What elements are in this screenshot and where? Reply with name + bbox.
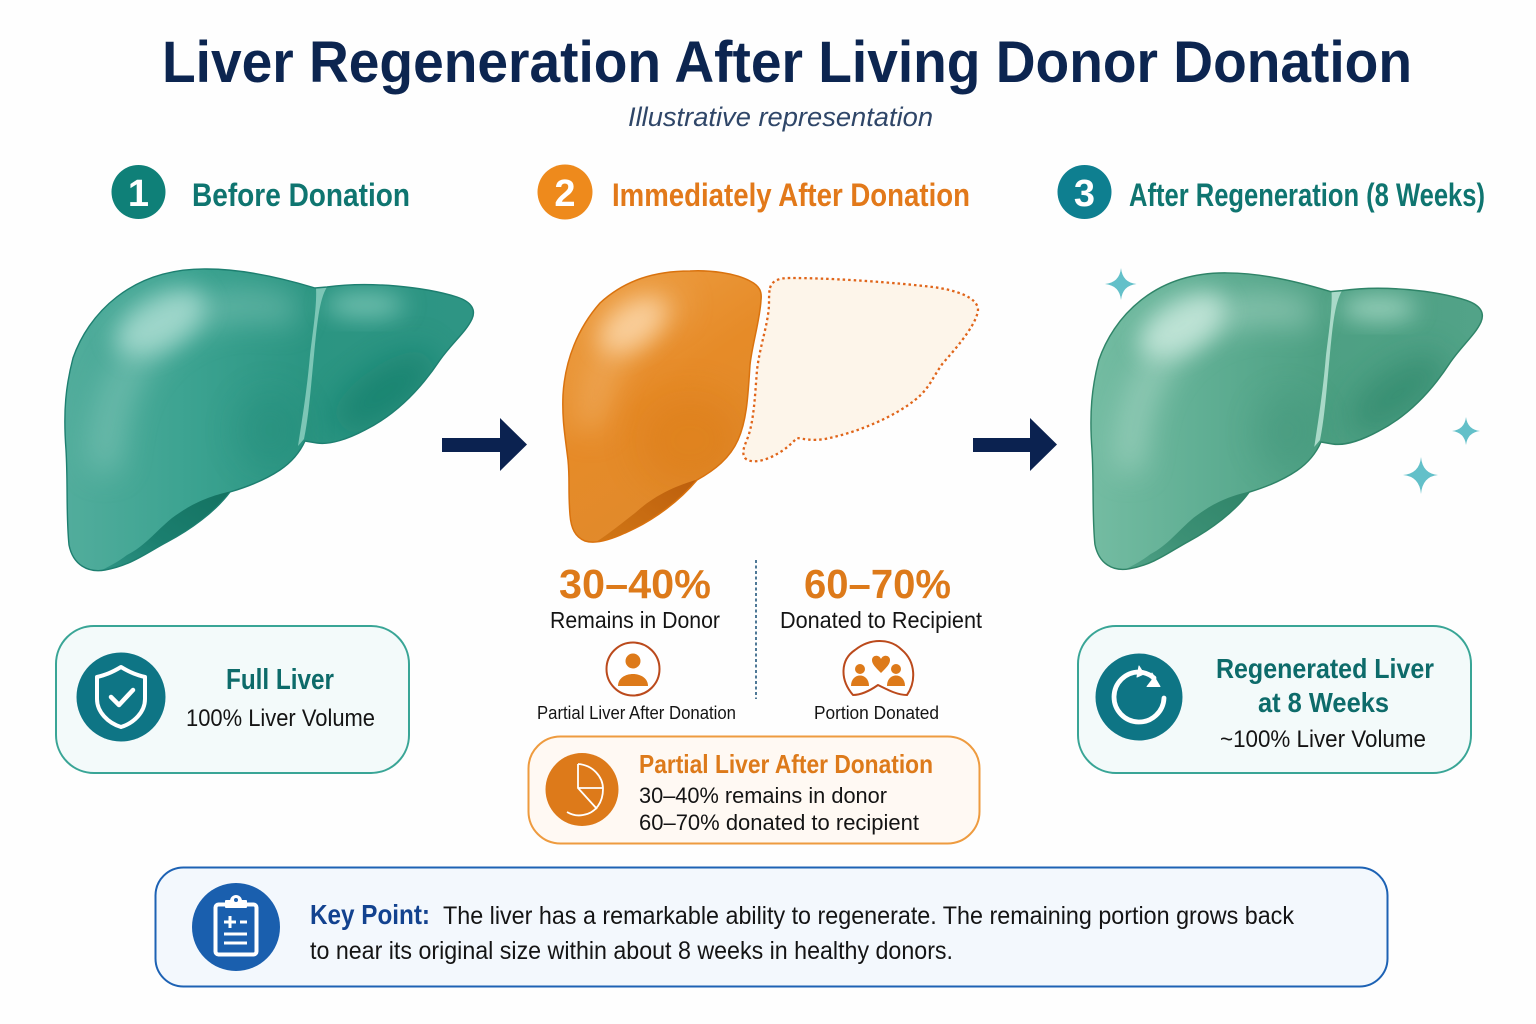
stat: remains in donor: [537, 561, 736, 723]
panel: partial liver after donation: 30–40% remains in donor: [639, 783, 887, 808]
panel: full liver: Full Liver: [226, 664, 334, 696]
partial orange liver illustration: [563, 271, 978, 560]
step 2 heading: [538, 164, 970, 220]
divider: [755, 560, 757, 699]
panel: full liver: [56, 626, 409, 773]
stat: remains in donor: Remains in Donor: [550, 607, 720, 633]
full liver illustration: [65, 269, 473, 590]
step 3 heading: [1058, 165, 1485, 219]
stat: donated to recipient: Donated to Recipient: [780, 607, 983, 633]
panel: key point: Key Point:: [310, 899, 430, 930]
panel: key point: [156, 868, 1388, 986]
icon: regeneration arrow: [1096, 654, 1182, 740]
falciform groove: [1314, 291, 1342, 447]
sparkles: [1105, 268, 1480, 494]
icon: shield with check: [76, 652, 166, 742]
step 2 heading: 2: [554, 173, 576, 215]
panel: regenerated liver: at 8 Weeks: [1258, 687, 1389, 718]
step 3 heading: 3: [1074, 173, 1095, 215]
panel: partial liver after donation: 60–70% donated to recipient: [639, 810, 919, 835]
stat: remains in donor: 30–40%: [559, 561, 711, 607]
step 1 heading: [112, 165, 410, 219]
step 2 heading: Immediately After Donation: [612, 177, 970, 213]
stat: donated to recipient: 60–70%: [804, 561, 951, 607]
panel: key point: to near its original size within about 8 weeks in healthy donors.: [310, 937, 953, 965]
icon: pie: [546, 753, 618, 826]
panel: partial liver after donation: [528, 736, 980, 844]
stat: donated to recipient: [780, 561, 983, 723]
step 1 heading: 1: [128, 173, 149, 215]
icon: donor person: [606, 642, 660, 696]
stat: donated to recipient: Portion Donated: [814, 703, 939, 723]
panel: full liver: 100% Liver Volume: [186, 705, 375, 732]
regenerated liver illustration: [1091, 268, 1482, 588]
arrow: step 1 to step 2: [442, 418, 527, 471]
panel: regenerated liver: ~100% Liver Volume: [1220, 726, 1426, 753]
step 1 heading: Before Donation: [192, 177, 410, 213]
panel: regenerated liver: Regenerated Liver: [1216, 653, 1434, 684]
falciform groove: [298, 287, 327, 446]
donated portion outline: [743, 278, 978, 461]
panel: key point: The liver has a remarkable ability to regenerate. The remaining portion grows back: [443, 902, 1294, 930]
title: Liver Regeneration After Living Donor Donation: [162, 30, 1412, 95]
icon: clipboard: [192, 883, 280, 971]
subtitle: Illustrative representation: [628, 102, 933, 132]
panel: regenerated liver: [1078, 626, 1471, 773]
stat: remains in donor: Partial Liver After Donation: [537, 703, 736, 723]
panel: partial liver after donation: Partial Liver After Donation: [639, 749, 933, 779]
icon: recipients and heart: [843, 641, 913, 695]
arrow: step 2 to step 3: [973, 418, 1057, 471]
